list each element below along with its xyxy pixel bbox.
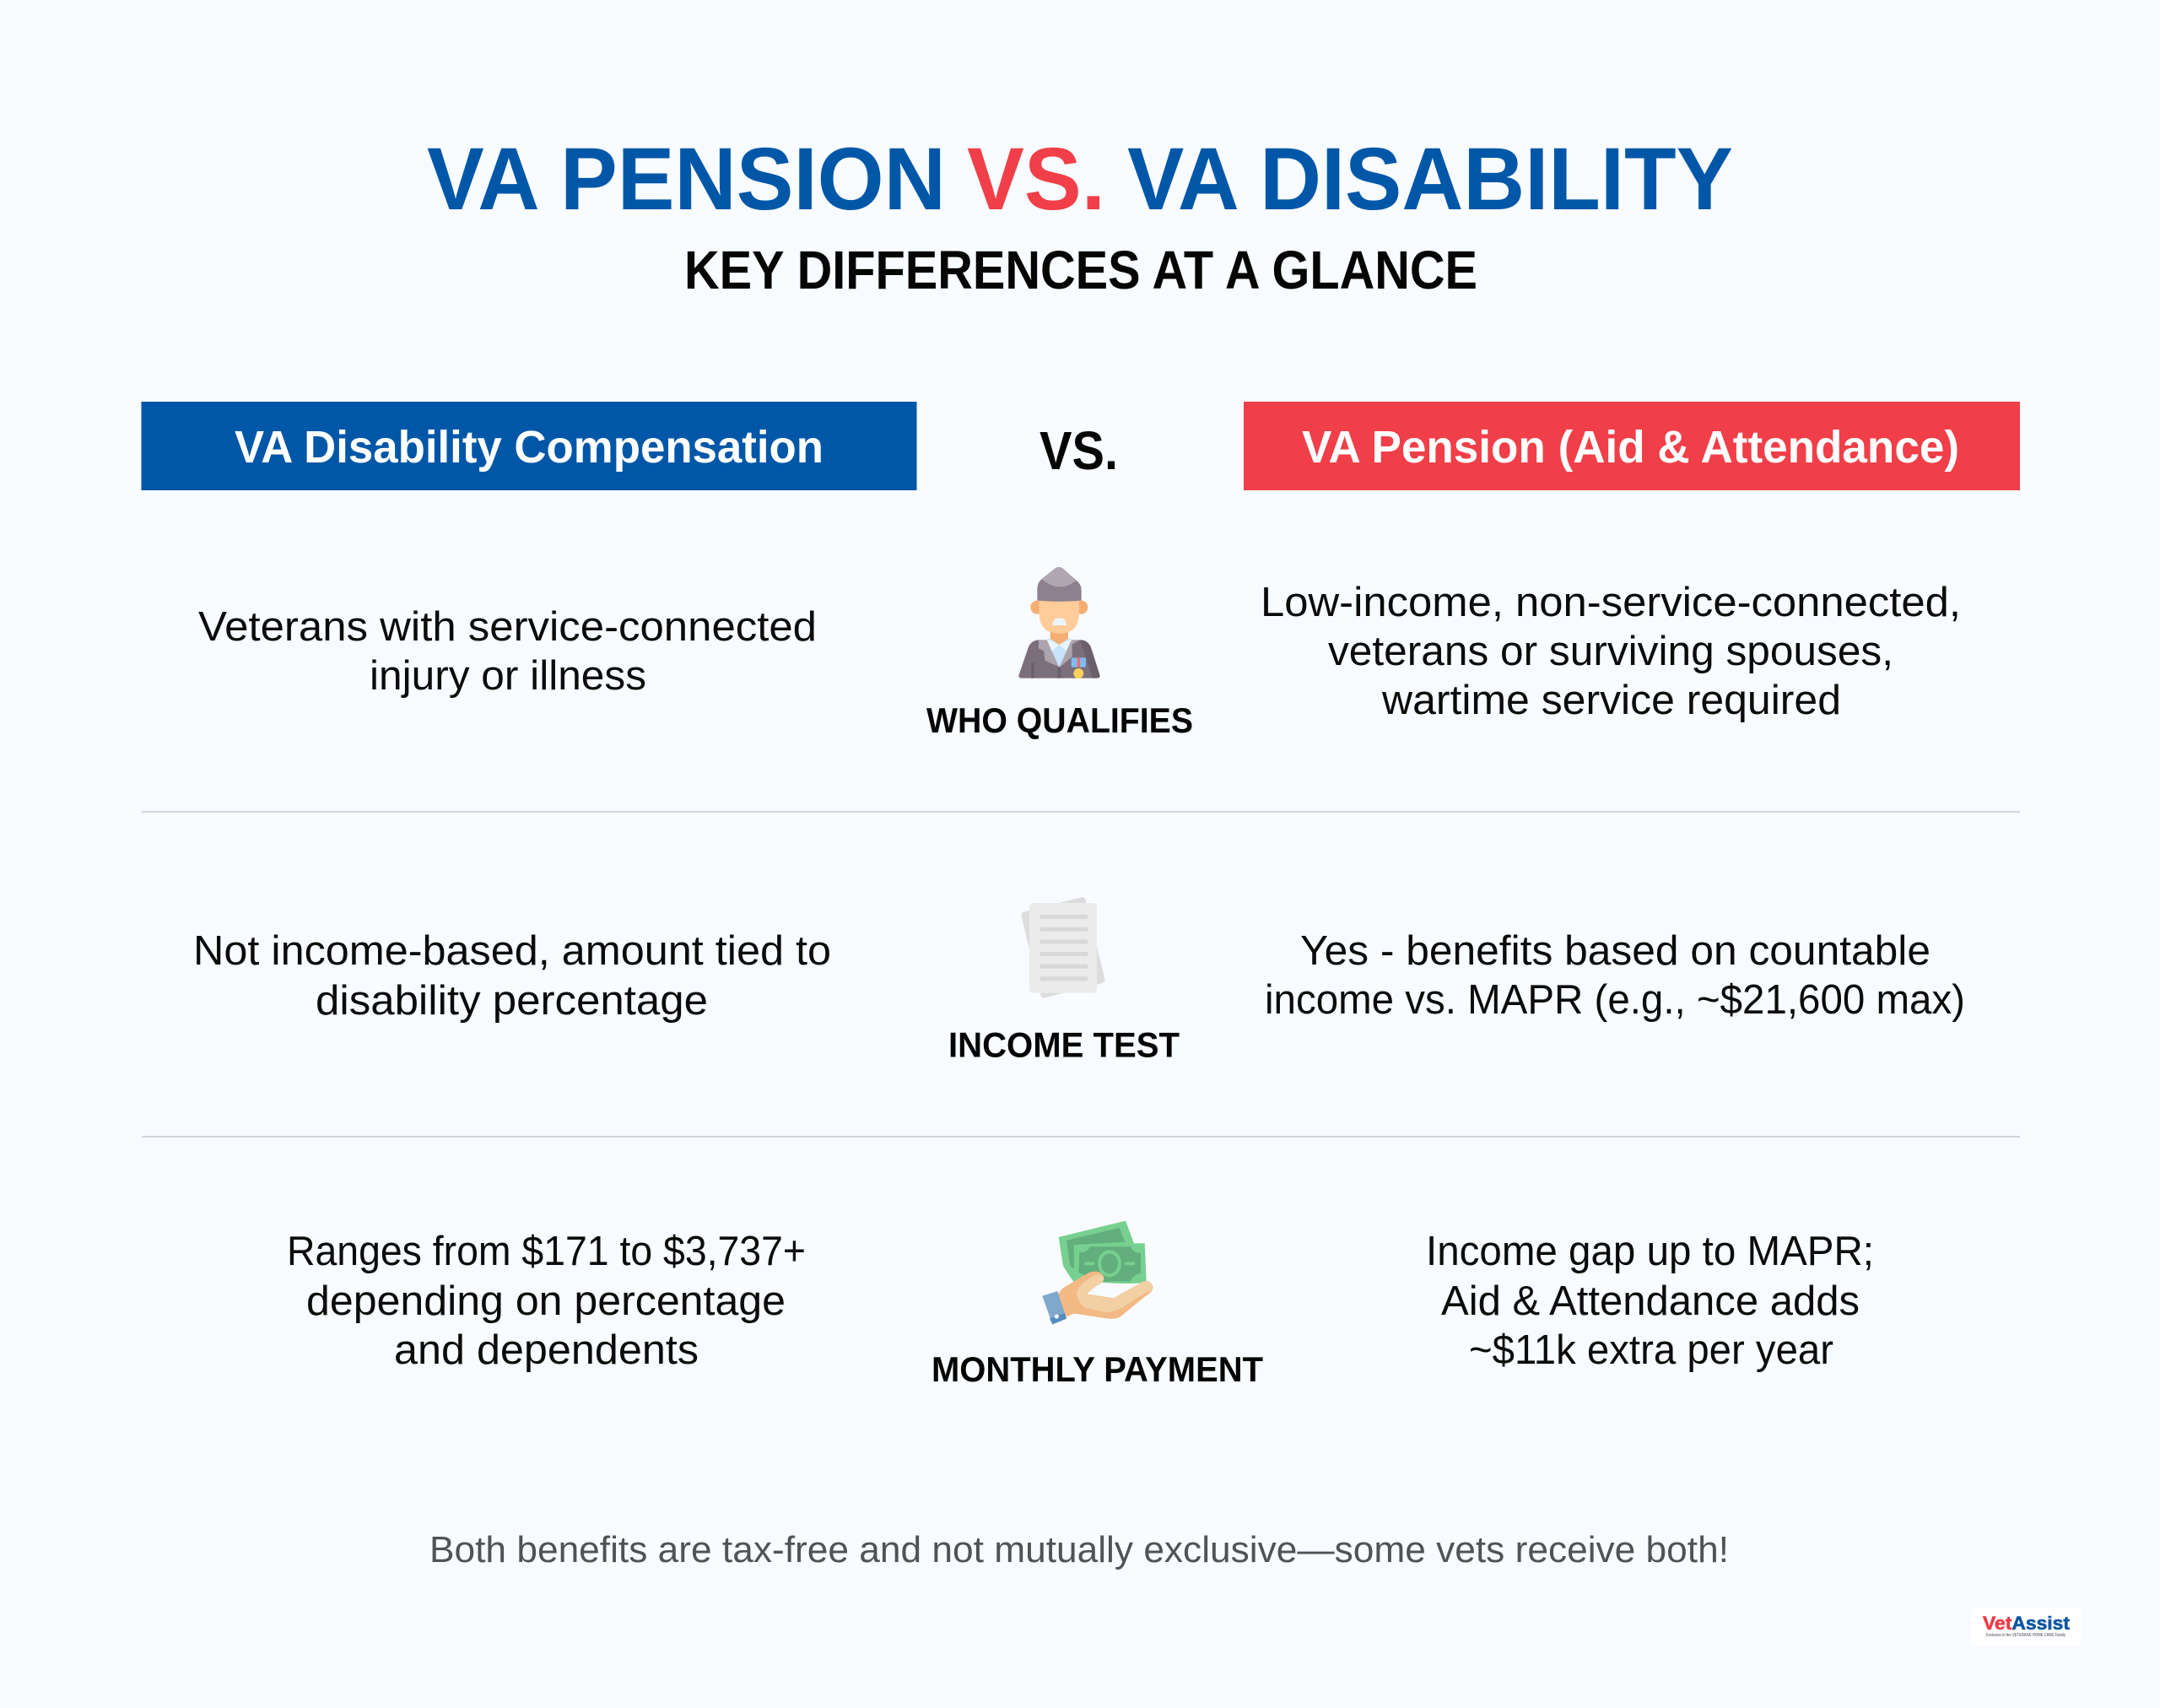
logo: VetAssist: Exclusive to the VETERANS HOME CARE Family [1986, 1633, 2066, 1638]
row 3 right text: ~$11k extra per year [1469, 1327, 1833, 1373]
label: who qualifies: WHO QUALIFIES [926, 700, 1193, 740]
title: VS. [967, 130, 1105, 229]
row 2 left text: disability percentage [316, 978, 708, 1024]
title: VA DISABILITY [1127, 130, 1733, 229]
icon: hand holding money [1042, 1221, 1153, 1324]
row 3 left text: and dependents [394, 1327, 699, 1373]
logo: VetAssist: VetAssist [1983, 1613, 2071, 1634]
row 2 left text: Not income-based, amount tied to [193, 928, 831, 974]
row 1 right text: Low-income, non-service-connected, [1261, 580, 1961, 625]
logo: VetAssist [1971, 1608, 2082, 1646]
row 2 left text [193, 928, 831, 1024]
row 3 right text: Aid & Attendance adds [1441, 1278, 1860, 1324]
row 1 right text: wartime service required [1381, 678, 1841, 723]
title: VA PENSION [427, 130, 946, 229]
header: VA Pension: VA Pension (Aid & Attendance) [1302, 422, 1959, 473]
title [427, 130, 1733, 229]
row 1 left text: Veterans with service-connected [198, 604, 817, 650]
label: monthly payment: MONTHLY PAYMENT [932, 1349, 1263, 1389]
label: income test: INCOME TEST [948, 1024, 1180, 1065]
icon: documents [1022, 897, 1104, 997]
row 3 left text [287, 1229, 806, 1373]
header: VA Pension [1244, 402, 2020, 490]
row 2 right text: Yes - benefits based on countable [1300, 928, 1930, 974]
row 3 left text: Ranges from $171 to $3,737+ [287, 1229, 806, 1274]
row 1 right text [1261, 580, 1961, 723]
row 3 left text: depending on percentage [306, 1278, 786, 1324]
row 3 right text: Income gap up to MAPR; [1426, 1229, 1874, 1274]
vs label: VS. [1040, 420, 1118, 481]
row 2 right text [1265, 928, 1965, 1023]
header: VA Disability Compensation: VA Disability Compensation [235, 422, 824, 473]
footer note: Both benefits are tax-free and not mutually exclusive—some vets receive both! [429, 1529, 1729, 1570]
row 2 right text: income vs. MAPR (e.g., ~$21,600 max) [1265, 977, 1965, 1023]
header: VA Disability Compensation [142, 402, 916, 490]
subtitle: KEY DIFFERENCES AT A GLANCE [684, 240, 1477, 300]
row 3 right text [1426, 1229, 1874, 1373]
row 1 left text [198, 604, 817, 699]
icon: veteran [1018, 567, 1100, 678]
row 1 right text: veterans or surviving spouses, [1328, 629, 1893, 674]
row 1 left text: injury or illness [370, 653, 646, 699]
